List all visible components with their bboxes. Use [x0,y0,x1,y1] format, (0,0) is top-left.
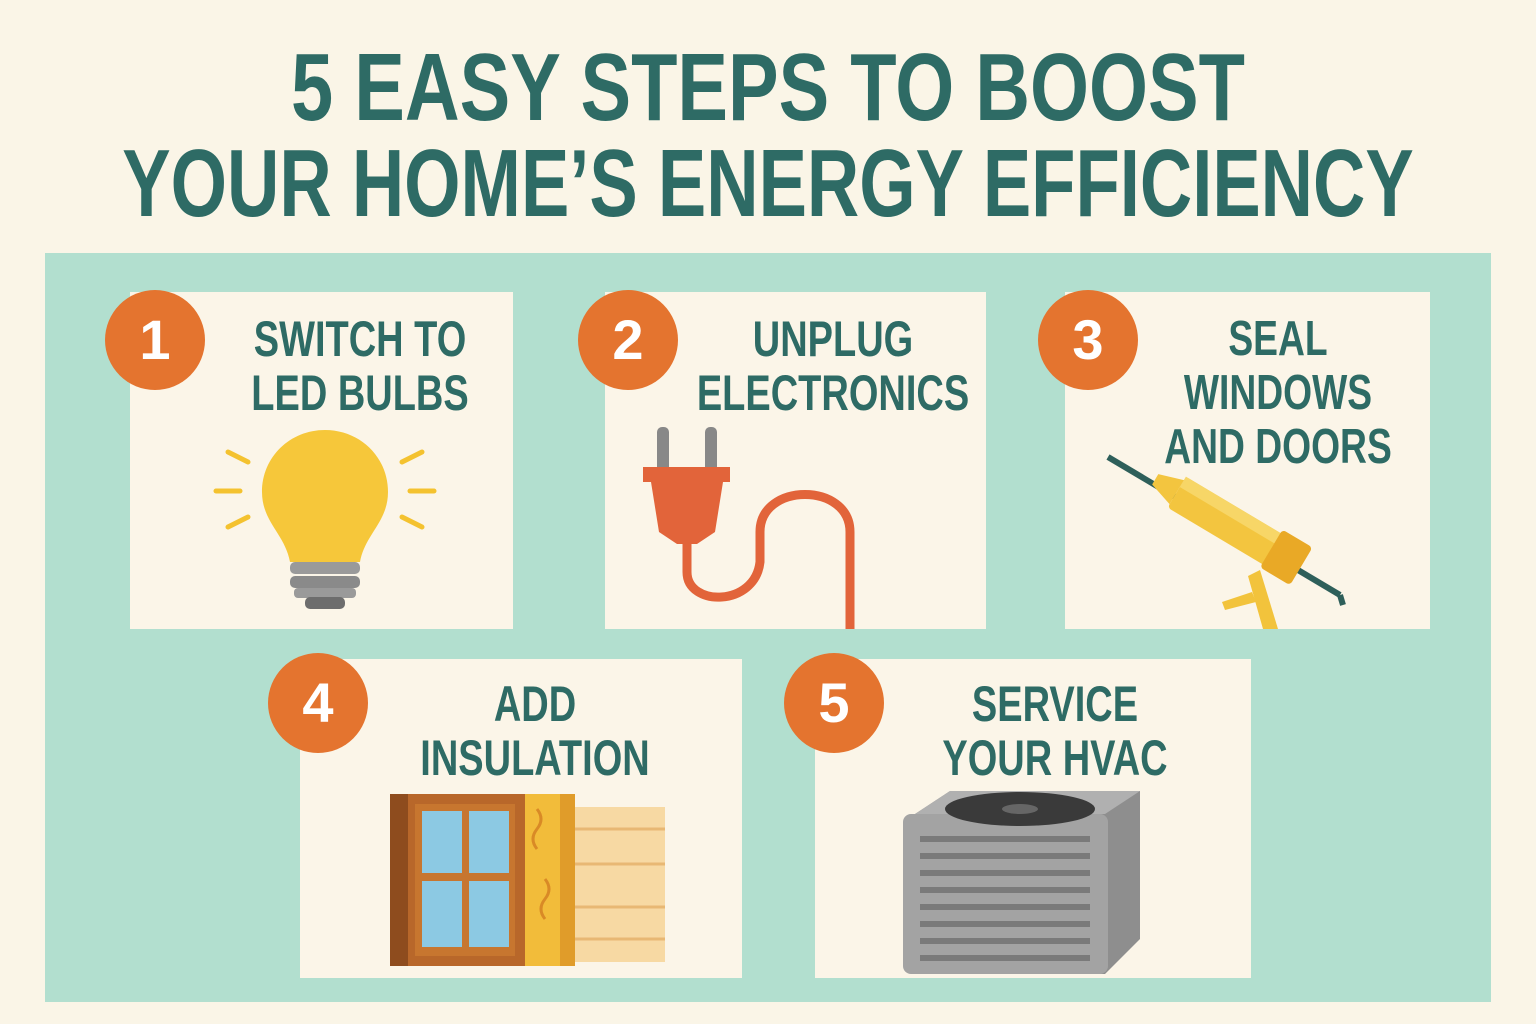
card 2 [605,292,986,629]
heading 5: YOUR HVAC [942,730,1168,786]
heading 3 [1164,312,1392,474]
heading 3: AND DOORS [1164,420,1392,474]
heading 5: SERVICE [972,676,1138,732]
heading 2: ELECTRONICS [697,365,969,421]
badge 4 [268,653,368,753]
heading 1 [251,311,469,421]
icon: light bulb [214,430,436,609]
title: 5 EASY STEPS TO BOOST [291,34,1245,141]
heading 4: INSULATION [420,730,650,786]
badge 2 [578,290,678,390]
panel: steps [45,253,1491,1002]
heading 1: LED BULBS [251,365,469,421]
heading 2: UNPLUG [753,311,913,367]
badge 1: 1 [139,308,171,371]
badge 5: 5 [818,671,850,734]
badge 5 [784,653,884,753]
badge 1 [105,290,205,390]
heading 1: SWITCH TO [254,311,466,367]
heading 4 [420,676,650,786]
title: YOUR HOME’S ENERGY EFFICIENCY [122,130,1414,237]
card 1 [130,292,513,629]
badge 3 [1038,290,1138,390]
title [122,34,1414,237]
heading 3: WINDOWS [1184,366,1372,420]
heading 4: ADD [494,676,576,732]
badge 4: 4 [302,671,334,734]
card 4 [300,659,742,978]
icon: plug [643,427,854,629]
icon: window with insulation [390,794,665,966]
heading 2 [697,311,969,421]
card 5 [815,659,1251,978]
icon: AC unit [903,791,1140,974]
badge 3: 3 [1072,308,1104,371]
card 3 [1065,292,1430,629]
badge 2: 2 [612,308,644,371]
heading 3: SEAL [1228,312,1328,366]
icon: caulk gun [1106,454,1346,629]
heading 5 [942,676,1168,786]
